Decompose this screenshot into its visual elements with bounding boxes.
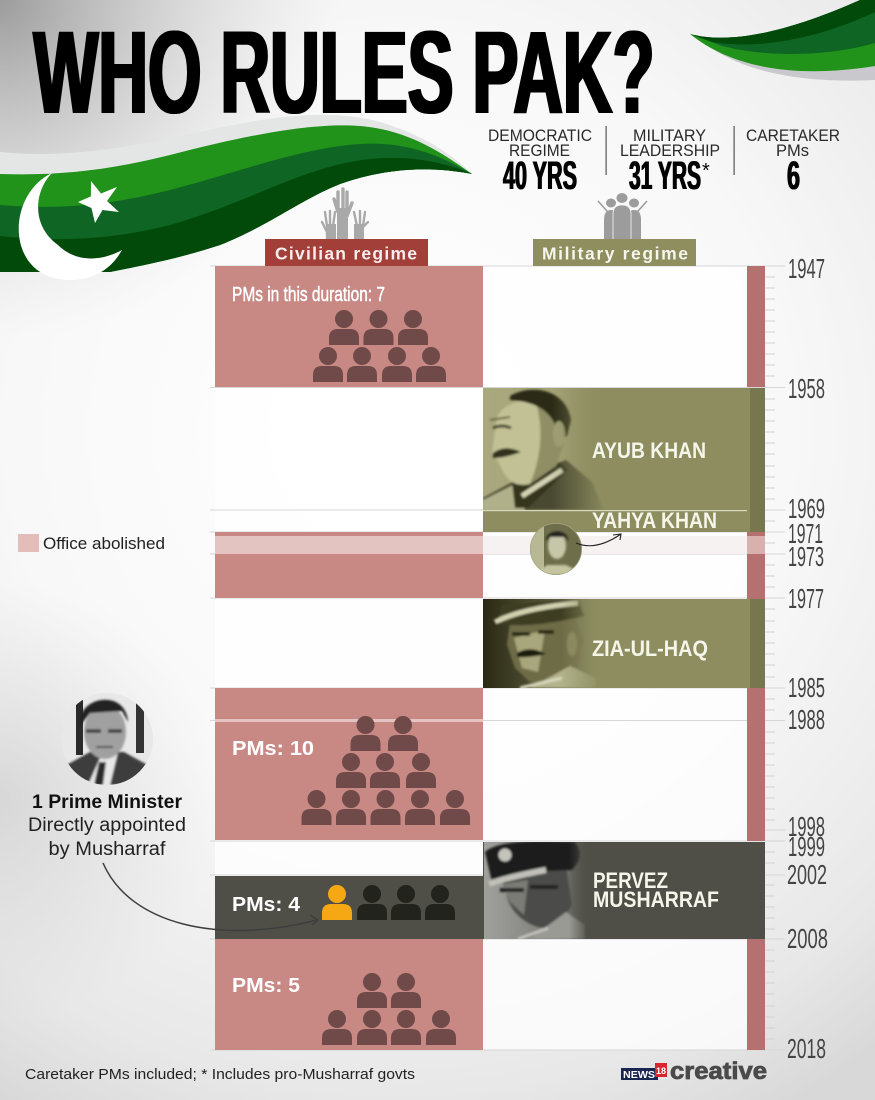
flag: top right bbox=[690, 0, 875, 81]
stat: caretaker PMs: 6 bbox=[787, 154, 800, 198]
stat: caretaker PMs: PMs bbox=[776, 141, 809, 160]
icon: raised hands bbox=[322, 189, 368, 239]
white plot area bbox=[215, 266, 750, 1050]
block: first PMs 7: PMs in this duration: 7 bbox=[232, 284, 385, 306]
right strip bbox=[747, 266, 765, 1050]
stat: military leadership bbox=[620, 126, 720, 198]
legend: office abolished: Office abolished bbox=[43, 534, 165, 553]
block: PMs 5: PMs: 5 bbox=[232, 975, 300, 997]
panel: Zia-ul-Haq bbox=[483, 599, 765, 688]
band: office abolished bbox=[215, 536, 765, 554]
tag: military regime bbox=[533, 239, 696, 266]
stat: democratic regime: REGIME bbox=[509, 141, 570, 160]
stat: democratic regime: DEMOCRATIC bbox=[488, 126, 592, 145]
stat: democratic regime: 40 YRS bbox=[503, 154, 577, 198]
stat: military leadership: LEADERSHIP bbox=[620, 141, 720, 160]
year labels: 1999 bbox=[788, 831, 825, 862]
logo: News18 creative: creative bbox=[670, 1058, 767, 1085]
panel: Pervez Musharraf bbox=[215, 841, 765, 939]
block: PMs 4 bbox=[232, 885, 455, 920]
year labels: 1973 bbox=[788, 541, 824, 572]
name: Yahya Khan: YAHYA KHAN bbox=[592, 508, 717, 533]
arrow: callout to yellow PM bbox=[103, 863, 318, 930]
block: PMs 10 bbox=[215, 716, 483, 825]
chart panel: timeline bbox=[210, 266, 785, 1050]
footnote: Caretaker PMs included; * Includes pro-Musharraf govts bbox=[25, 1066, 415, 1083]
tag: military regime: Military regime bbox=[542, 244, 688, 264]
panel: Pervez Musharraf: MUSHARRAF bbox=[593, 887, 719, 912]
logo: News18 creative: 18 bbox=[656, 1066, 666, 1076]
year labels: 1985 bbox=[788, 672, 825, 703]
year labels: 1988 bbox=[788, 704, 825, 735]
tag: civilian regime: Civilian regime bbox=[275, 244, 417, 264]
year labels bbox=[787, 253, 828, 1064]
name: ZIA-UL-HAQ bbox=[592, 636, 708, 661]
text: prime minister callout: 1 Prime Minister bbox=[32, 792, 183, 813]
stat: military leadership: MILITARY bbox=[633, 126, 706, 145]
text: prime minister callout: by Musharraf bbox=[48, 839, 166, 860]
year labels: 2008 bbox=[787, 923, 828, 954]
portrait: Zia-ul-Haq bbox=[483, 599, 603, 688]
gridlines bbox=[210, 266, 785, 1050]
year labels: 1969 bbox=[788, 493, 825, 524]
icon: soldiers bbox=[598, 193, 647, 240]
block: PMs 4: PMs: 4 bbox=[232, 894, 301, 916]
tag: civilian regime bbox=[265, 239, 428, 266]
year labels: 1971 bbox=[788, 518, 823, 549]
year labels: 2002 bbox=[787, 859, 827, 890]
year labels: 1958 bbox=[788, 373, 825, 404]
name: AYUB KHAN bbox=[592, 438, 706, 463]
logo: News18 creative: NEWS bbox=[623, 1070, 655, 1081]
portrait: Pervez Musharraf bbox=[484, 841, 590, 939]
stat: caretaker PMs bbox=[746, 126, 840, 198]
civilian bars bbox=[215, 266, 483, 1050]
flag: left with crescent and star bbox=[0, 115, 472, 280]
year labels: 2018 bbox=[787, 1033, 826, 1064]
block: PMs 5 bbox=[232, 973, 456, 1045]
stat: military leadership: * bbox=[702, 160, 710, 182]
panel: Ayub Khan bbox=[483, 388, 765, 532]
stat: caretaker PMs: CARETAKER bbox=[746, 126, 840, 145]
portrait: Ayub Khan bbox=[483, 388, 608, 510]
stat: democratic regime bbox=[488, 126, 592, 198]
year labels: 1998 bbox=[788, 811, 825, 842]
name: PERVEZ bbox=[593, 868, 668, 893]
portrait: Musharraf in suit bbox=[61, 693, 153, 785]
portrait: Yahya Khan bbox=[530, 523, 582, 575]
arrow: Yahya bbox=[576, 534, 621, 546]
crescent bbox=[19, 173, 122, 280]
logo: News18 creative bbox=[621, 1058, 767, 1085]
year labels: 1947 bbox=[788, 253, 825, 284]
star bbox=[78, 181, 119, 223]
block: first PMs 7 bbox=[232, 284, 446, 382]
block: PMs 10: PMs: 10 bbox=[232, 738, 314, 760]
text: prime minister callout: Directly appointed bbox=[28, 815, 186, 836]
stat: military leadership: 31 YRS bbox=[629, 154, 701, 198]
year labels: 1977 bbox=[788, 583, 824, 614]
ticks bbox=[765, 277, 775, 1039]
text: prime minister callout bbox=[28, 792, 186, 860]
